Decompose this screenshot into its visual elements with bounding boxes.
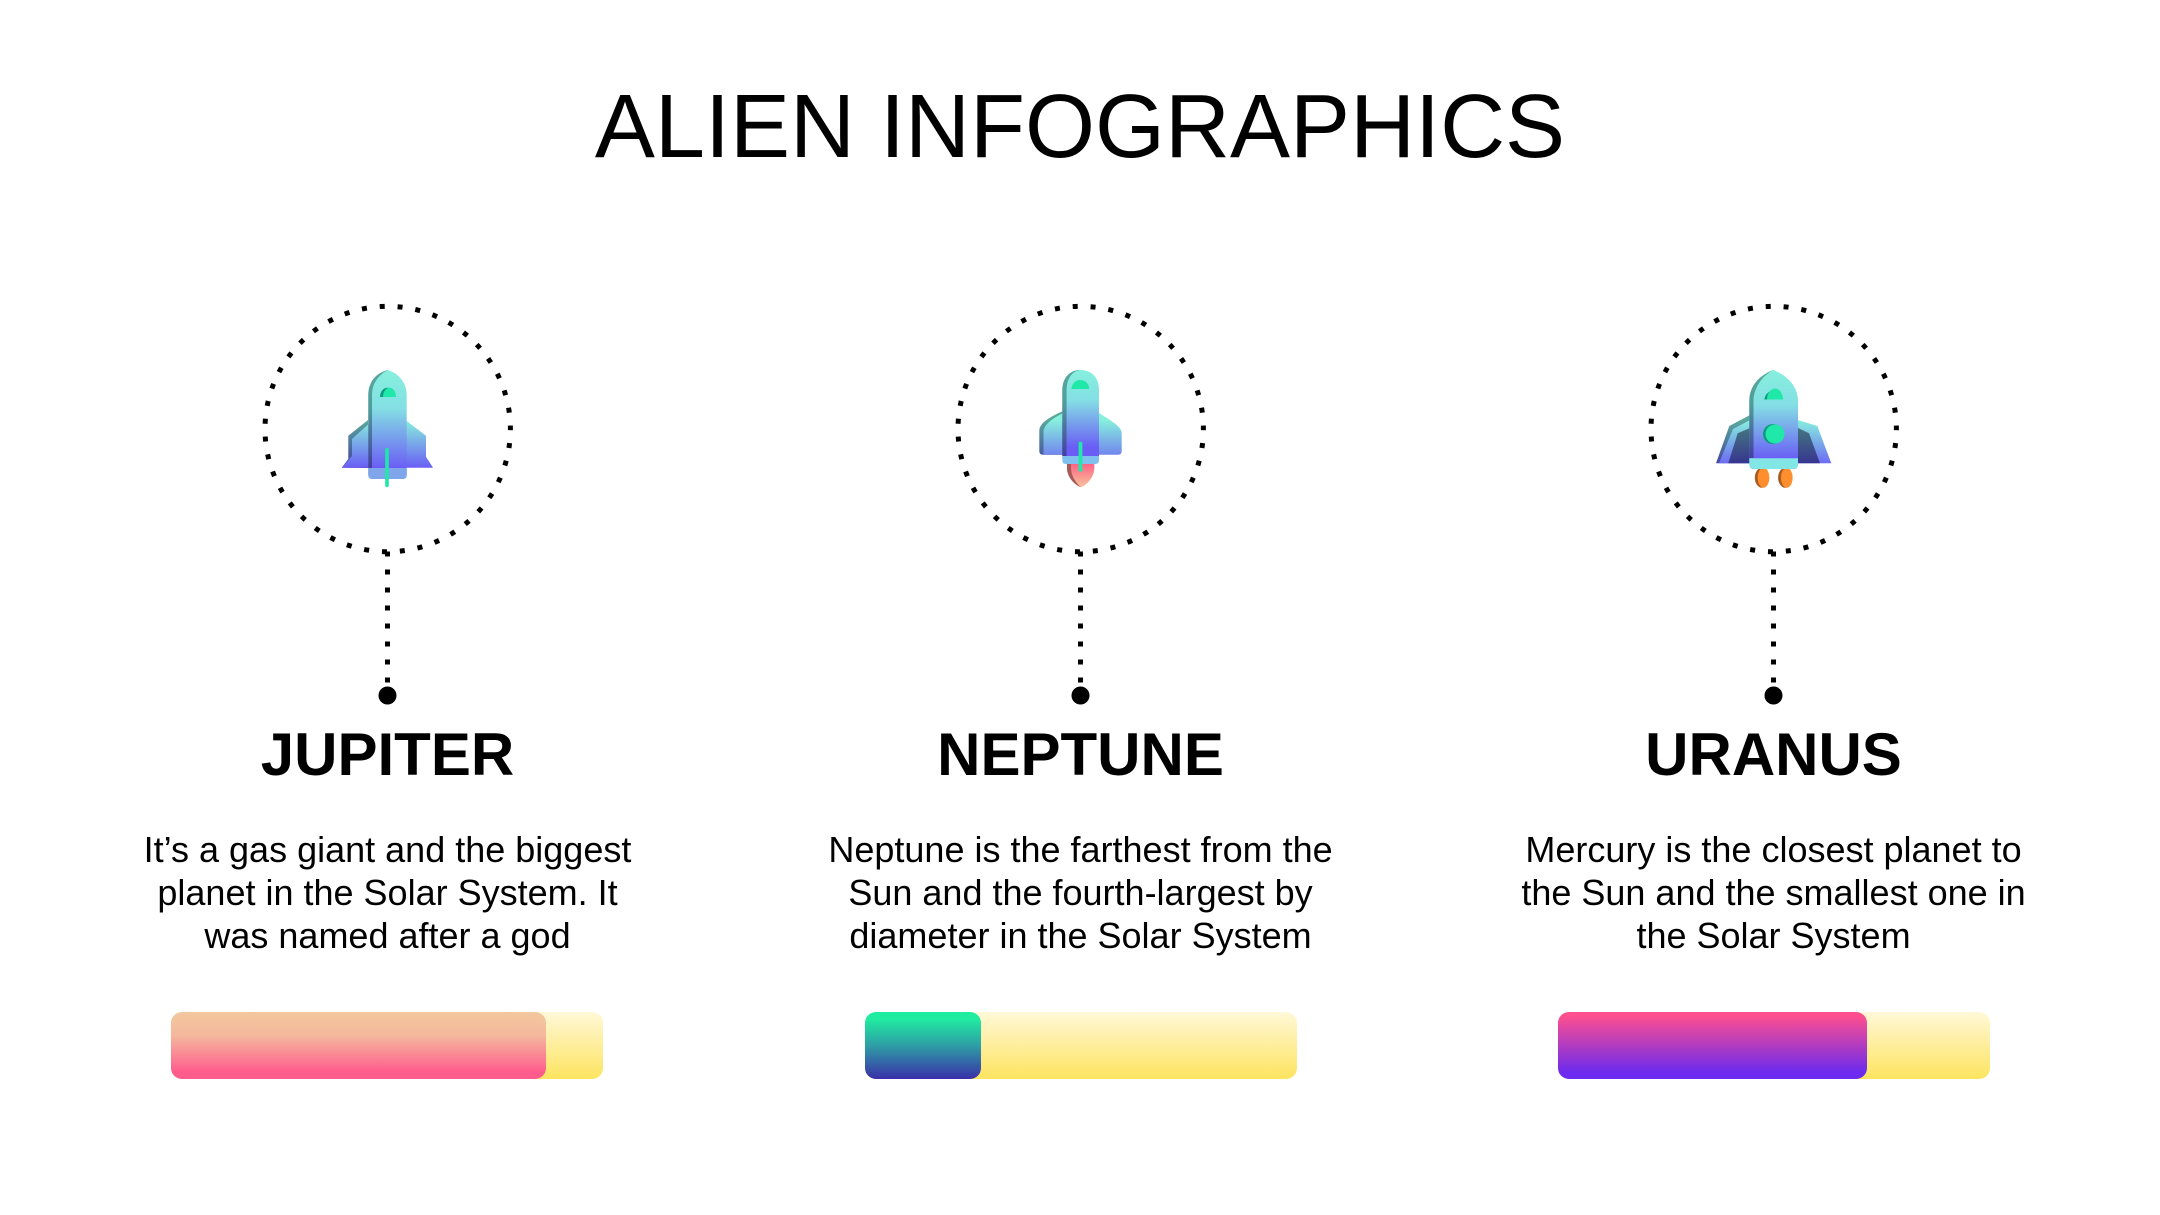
text: neptune description: diameter in the Solar System — [849, 915, 1312, 956]
text: uranus description — [1521, 829, 2026, 956]
neptune connector — [1072, 552, 1090, 704]
text: uranus description: Mercury is the closest planet to — [1525, 829, 2022, 870]
icon: jupiter rocket — [342, 370, 433, 487]
text: jupiter description: It’s a gas giant and the biggest — [144, 829, 631, 870]
uranus dotted circle — [1651, 306, 1896, 552]
text: jupiter description: planet in the Solar System. It — [157, 872, 618, 913]
text: neptune description — [828, 829, 1333, 956]
title: ALIEN INFOGRAPHICS — [595, 76, 1565, 176]
icon: neptune rocket — [1039, 370, 1122, 487]
text: neptune description: Neptune is the farthest from the — [828, 829, 1333, 870]
progress bar: neptune — [864, 1012, 1296, 1079]
text: jupiter description — [144, 829, 632, 956]
text: neptune description: Sun and the fourth-largest by — [848, 872, 1313, 913]
progress bar: uranus — [1558, 1012, 1990, 1079]
icon: uranus rocket — [1716, 370, 1831, 488]
neptune dotted circle — [958, 306, 1203, 552]
heading: jupiter: JUPITER — [261, 721, 514, 788]
jupiter dotted circle — [265, 306, 510, 552]
progress bar: jupiter — [171, 1012, 603, 1079]
heading: neptune: NEPTUNE — [937, 721, 1224, 788]
text: uranus description: the Solar System — [1636, 915, 1911, 956]
text: uranus description: the Sun and the smallest one in — [1521, 872, 2026, 913]
text: jupiter description: was named after a god — [204, 915, 571, 956]
uranus connector — [1764, 552, 1782, 704]
jupiter connector — [378, 552, 396, 704]
heading: uranus: URANUS — [1645, 721, 1902, 788]
